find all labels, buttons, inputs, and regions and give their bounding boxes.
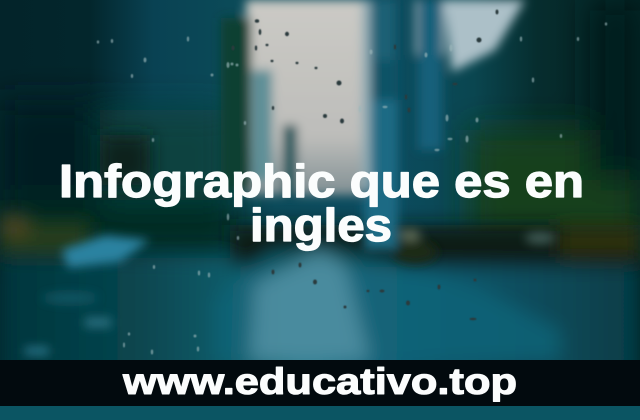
website footer bar: www.educativo.top bbox=[122, 361, 517, 402]
raindrops on the glass bbox=[232, 10, 498, 320]
title bbox=[59, 155, 584, 251]
website footer bar bbox=[0, 360, 640, 406]
light water droplets bbox=[97, 22, 607, 355]
title: ingles bbox=[250, 199, 392, 251]
bottom strip below footer bbox=[0, 404, 640, 420]
title: Infographic que es en bbox=[59, 155, 584, 207]
